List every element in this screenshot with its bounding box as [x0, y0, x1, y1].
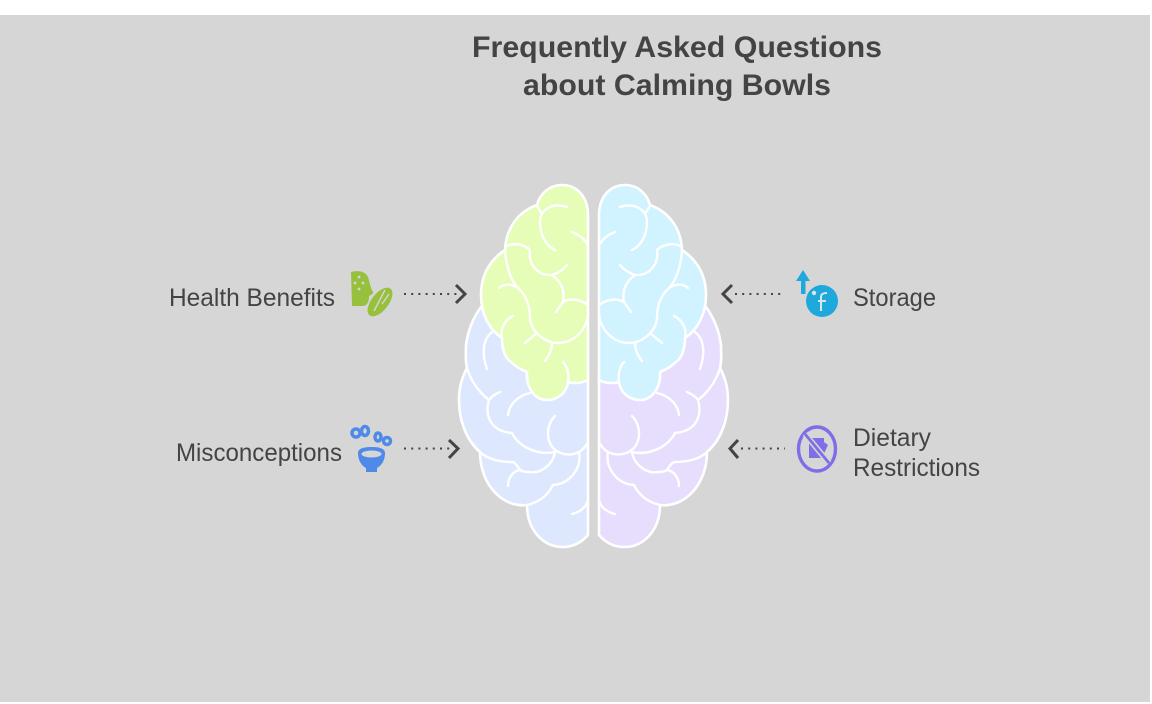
brain lobe: storage: [599, 185, 706, 400]
brain lobe: health benefits: [481, 185, 588, 400]
title: about Calming Bowls: [523, 69, 831, 102]
icon: bowl and pretzels: [352, 426, 390, 472]
label: health benefits: Health Benefits: [169, 284, 335, 312]
label: dietary restrictions: Dietary: [853, 424, 931, 452]
arrow: health benefits: [404, 285, 465, 303]
title: Frequently Asked Questions: [472, 31, 882, 64]
icon: temperature up: [796, 270, 838, 317]
icon: prohibited food: [798, 427, 836, 471]
label: dietary restrictions: [853, 424, 980, 482]
label: dietary restrictions: Restrictions: [853, 454, 980, 482]
arrow: misconceptions: [404, 440, 458, 458]
title: [472, 31, 882, 102]
label: storage: Storage: [853, 284, 936, 312]
label: misconceptions: Misconceptions: [176, 439, 342, 467]
brain diagram: [459, 185, 728, 547]
arrow: dietary restrictions: [730, 440, 785, 458]
brain lobe: misconceptions: [459, 307, 588, 547]
brain lobe: dietary restrictions: [599, 307, 728, 547]
arrow: storage: [723, 285, 785, 303]
icon: face and peanut: [351, 271, 397, 321]
